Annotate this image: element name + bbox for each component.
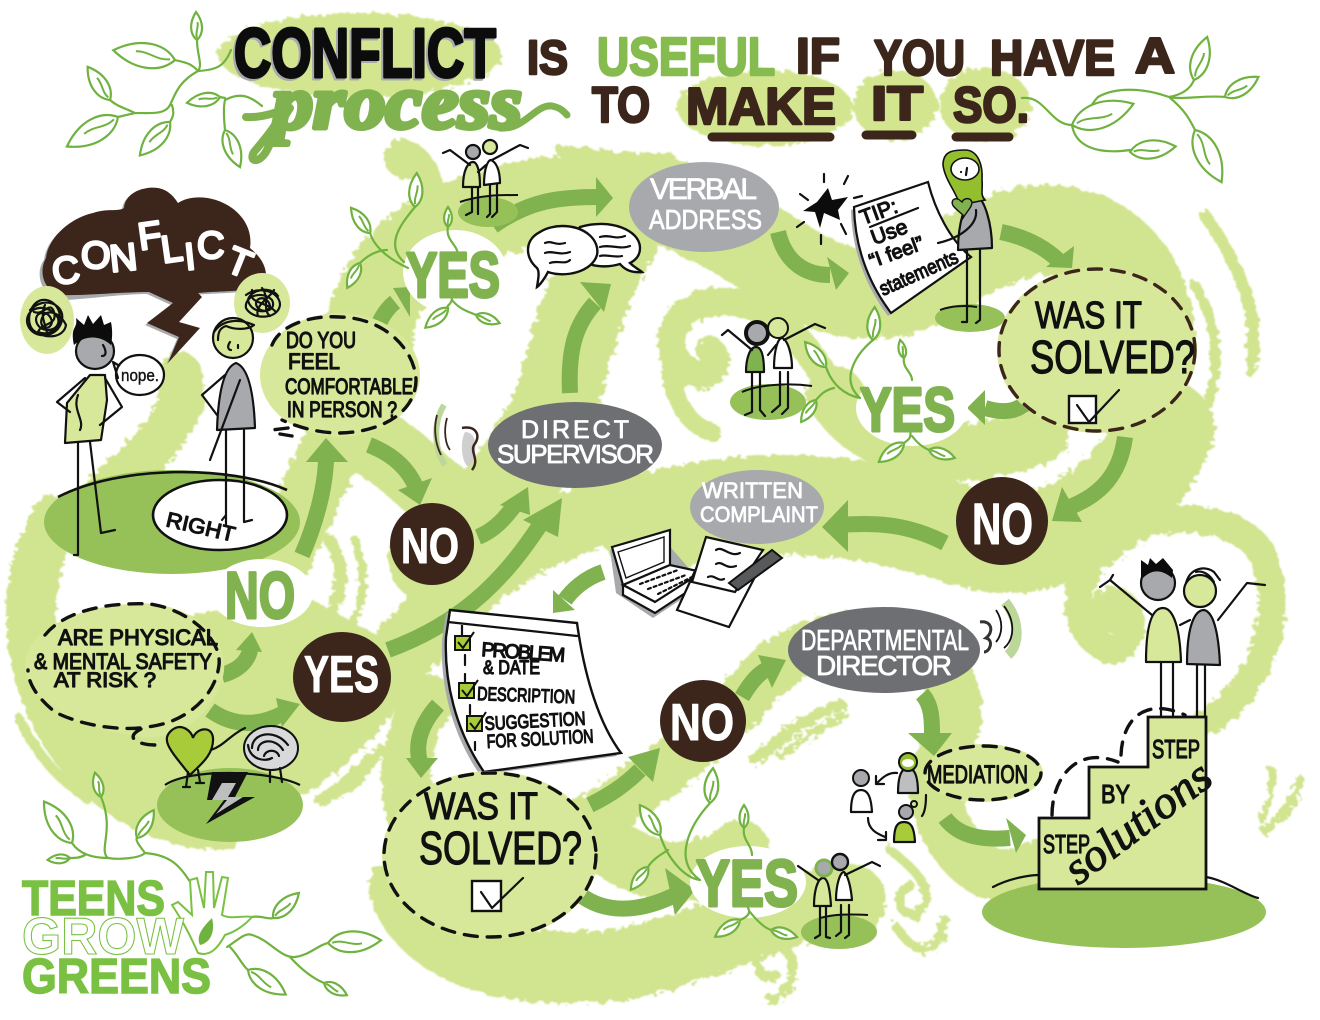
figures: pair cheering at top bbox=[443, 140, 528, 227]
node: direct supervisor bbox=[488, 402, 662, 488]
node: do you feel comfortable bubble bbox=[260, 313, 420, 437]
stair labels: STEP bbox=[1043, 829, 1090, 859]
arrow: laptop to checklist bbox=[553, 572, 603, 613]
arrow: checklist to solved bbox=[406, 705, 438, 778]
arrow: do you to no bbox=[369, 445, 432, 505]
scribble right bbox=[234, 273, 290, 333]
node: direct supervisor: SUPERVISOR bbox=[497, 439, 654, 469]
title highlight blobs bbox=[218, 13, 1031, 146]
node: direct supervisor: DIRECT bbox=[521, 416, 629, 444]
checkbox bbox=[1069, 390, 1119, 423]
arrows bbox=[210, 177, 1125, 915]
node: brown yes bbox=[293, 632, 391, 722]
icon: tip paper: TIP: bbox=[857, 195, 901, 230]
node: mediation bubble bbox=[923, 744, 1043, 802]
figure: left person bbox=[851, 770, 872, 812]
icon: tip paper: statements bbox=[876, 246, 962, 301]
arrow: do you to yes bbox=[372, 287, 410, 350]
figure: right winner bbox=[1180, 568, 1265, 717]
node: verbal address: ADDRESS bbox=[649, 204, 762, 235]
node: written complaint bbox=[690, 470, 824, 544]
scene: staircase: STEP bbox=[1152, 734, 1200, 764]
node: white yes middle with vine bbox=[797, 307, 968, 467]
node: white yes top with vine: YES bbox=[406, 239, 500, 311]
logo: teens grow greens: GROW bbox=[22, 908, 185, 966]
arrow: no to do you bbox=[302, 438, 348, 555]
icon: ear with sound waves supervisor bbox=[435, 405, 477, 470]
heading: process script bbox=[246, 61, 567, 160]
vine: title right bbox=[1022, 34, 1262, 187]
icon: ear with sound waves director bbox=[980, 602, 1017, 655]
figure: bottom person bbox=[894, 801, 917, 842]
logo: teens grow greens: GREENS bbox=[22, 950, 211, 1004]
checkbox bbox=[472, 878, 523, 911]
title: USEFUL bbox=[597, 27, 775, 87]
icon: laptop bbox=[610, 530, 703, 618]
vine: title left bbox=[61, 12, 262, 170]
arrow: yes to verbal address bbox=[493, 177, 613, 226]
scene: staircase: BY bbox=[1101, 779, 1130, 809]
title: HAVE bbox=[990, 30, 1115, 86]
checklist paper bbox=[442, 610, 621, 775]
heading: to make it so: TO bbox=[592, 77, 650, 133]
checkboxes bbox=[455, 632, 486, 731]
arrow: solved to yes bottom bbox=[578, 868, 695, 915]
node: are physical and mental safety bubble: ARE PHYSICAL bbox=[58, 625, 218, 650]
arrow: solved to no bbox=[1052, 437, 1125, 522]
heading: conflict: CONFLICT bbox=[232, 16, 494, 94]
arrow: mediation to steps bbox=[945, 818, 1026, 853]
nope speech bubble: nope. bbox=[121, 366, 159, 385]
arrow: no to written complaint bbox=[822, 500, 945, 552]
node: brown no right bbox=[956, 477, 1048, 565]
arrow: yes to direct supervisor long bbox=[388, 498, 562, 650]
node: white yes bottom with vine bbox=[626, 768, 806, 942]
node: written complaint: COMPLAINT bbox=[700, 502, 818, 527]
right circle: RIGHT bbox=[164, 508, 237, 547]
node: white no: NO bbox=[225, 558, 295, 632]
cloud: CONFLICT bbox=[49, 214, 258, 294]
title: CONFLICT bbox=[234, 14, 496, 92]
icon: heart and brain on cracked hill bbox=[157, 726, 303, 842]
nope speech bubble bbox=[113, 355, 164, 395]
arrow: safety question to yes bbox=[210, 698, 300, 727]
figure: woman in hijab bbox=[935, 150, 1005, 332]
figures: pair cheering beside middle yes bbox=[722, 318, 825, 420]
node: verbal address bbox=[629, 162, 779, 252]
arrow: no to departmental director bbox=[742, 655, 786, 697]
node: white yes bottom with vine: YES bbox=[696, 846, 798, 920]
node: brown yes: YES bbox=[304, 646, 379, 704]
arrow: tip to was it solved bbox=[1001, 232, 1074, 268]
title: A bbox=[1135, 28, 1175, 84]
arrow: solved to yes bbox=[967, 390, 1033, 425]
checklist paper: DESCRIPTION bbox=[477, 684, 575, 708]
figure: left winner bbox=[1100, 558, 1181, 717]
node: white yes middle with vine: YES bbox=[860, 376, 955, 445]
node: was it solved bottom: SOLVED? bbox=[419, 822, 582, 874]
node: was it solved bottom: WAS IT bbox=[424, 786, 538, 828]
node: mediation bubble: MEDIATION bbox=[927, 761, 1028, 789]
figure: mediator with hijab bbox=[898, 753, 918, 793]
node: verbal address: VERBAL bbox=[650, 173, 757, 206]
small arrows between people bbox=[868, 773, 926, 840]
checklist paper: FOR SOLUTION bbox=[486, 726, 594, 753]
node: white yes top with vine bbox=[342, 173, 507, 332]
arrow: verbal to tip bbox=[778, 232, 849, 290]
node: do you feel comfortable bubble: COMFORTABLE bbox=[285, 374, 413, 399]
scribble left bbox=[20, 286, 74, 354]
node: do you feel comfortable bubble: IN PERSON ? bbox=[287, 397, 397, 422]
right circle bbox=[153, 480, 287, 550]
node: are physical and mental safety bubble bbox=[25, 603, 224, 745]
node: do you feel comfortable bubble: DO YOU bbox=[286, 327, 356, 353]
title bbox=[218, 13, 1175, 160]
node: brown no bottom bbox=[660, 680, 746, 762]
title: IF bbox=[796, 28, 840, 84]
node: are physical and mental safety bubble: & MENTAL SAFETY bbox=[34, 649, 212, 674]
scene: conflict cloud and two people bbox=[20, 188, 300, 574]
title: YOU bbox=[874, 30, 965, 86]
figures: pair cheering beside bottom yes bbox=[798, 854, 880, 949]
node: brown no left: NO bbox=[401, 518, 459, 574]
title: MAKE bbox=[686, 78, 836, 136]
node: brown no right: NO bbox=[972, 492, 1033, 557]
arrow: supervisor to verbal bbox=[570, 282, 611, 393]
node: was it solved top: WAS IT bbox=[1035, 295, 1142, 337]
heading: process script: process bbox=[266, 61, 522, 145]
node: do you feel comfortable bubble: FEEL bbox=[288, 349, 340, 374]
logo: teens grow greens: TEENS bbox=[22, 872, 165, 926]
arrow: director to mediation bbox=[908, 694, 952, 756]
checklist paper: SUGGESTION bbox=[484, 709, 586, 735]
node: departmental director bbox=[788, 607, 980, 693]
scene: staircase bbox=[982, 558, 1266, 948]
node: written complaint: WRITTEN bbox=[702, 478, 803, 503]
node: was it solved top: SOLVED? bbox=[1030, 331, 1195, 383]
node: are physical and mental safety bubble: AT RISK ? bbox=[54, 669, 156, 692]
icon: tip paper bbox=[851, 182, 971, 316]
person left with arms akimbo bbox=[57, 315, 122, 555]
cloud bbox=[40, 188, 266, 365]
mediation group bbox=[851, 744, 1043, 842]
icon: tip paper: Use bbox=[868, 215, 911, 250]
arrow: solved to no bottom bbox=[590, 748, 660, 805]
icon: tip paper: “I feel” bbox=[866, 233, 927, 273]
arrow: safety question to no bbox=[222, 632, 262, 675]
node: brown no bottom: NO bbox=[670, 694, 734, 752]
arrow: no to direct supervisor bbox=[478, 487, 530, 537]
title: IT bbox=[871, 78, 923, 131]
solutions script: solutions bbox=[1053, 750, 1221, 894]
icon: paper and pen bbox=[677, 537, 782, 627]
checklist paper: PROBLEM bbox=[481, 639, 566, 667]
hand outline bbox=[172, 872, 252, 954]
node: brown no left bbox=[390, 503, 474, 585]
node: was it solved top bbox=[997, 267, 1197, 433]
person right with cane arm bbox=[202, 318, 255, 525]
checklist paper: & DATE bbox=[483, 658, 540, 679]
node: departmental director: DEPARTMENTAL bbox=[801, 625, 969, 657]
icon: star burst bbox=[797, 174, 862, 244]
node: was it solved bottom bbox=[382, 771, 598, 939]
heading: is useful if you have a: IS bbox=[527, 32, 568, 85]
icon: overlapping speech bubbles bbox=[528, 224, 642, 287]
node: departmental director: DIRECTOR bbox=[816, 650, 952, 681]
grass mound left bbox=[44, 470, 300, 574]
title: SO. bbox=[953, 77, 1029, 133]
logo: teens grow greens bbox=[22, 772, 381, 1004]
